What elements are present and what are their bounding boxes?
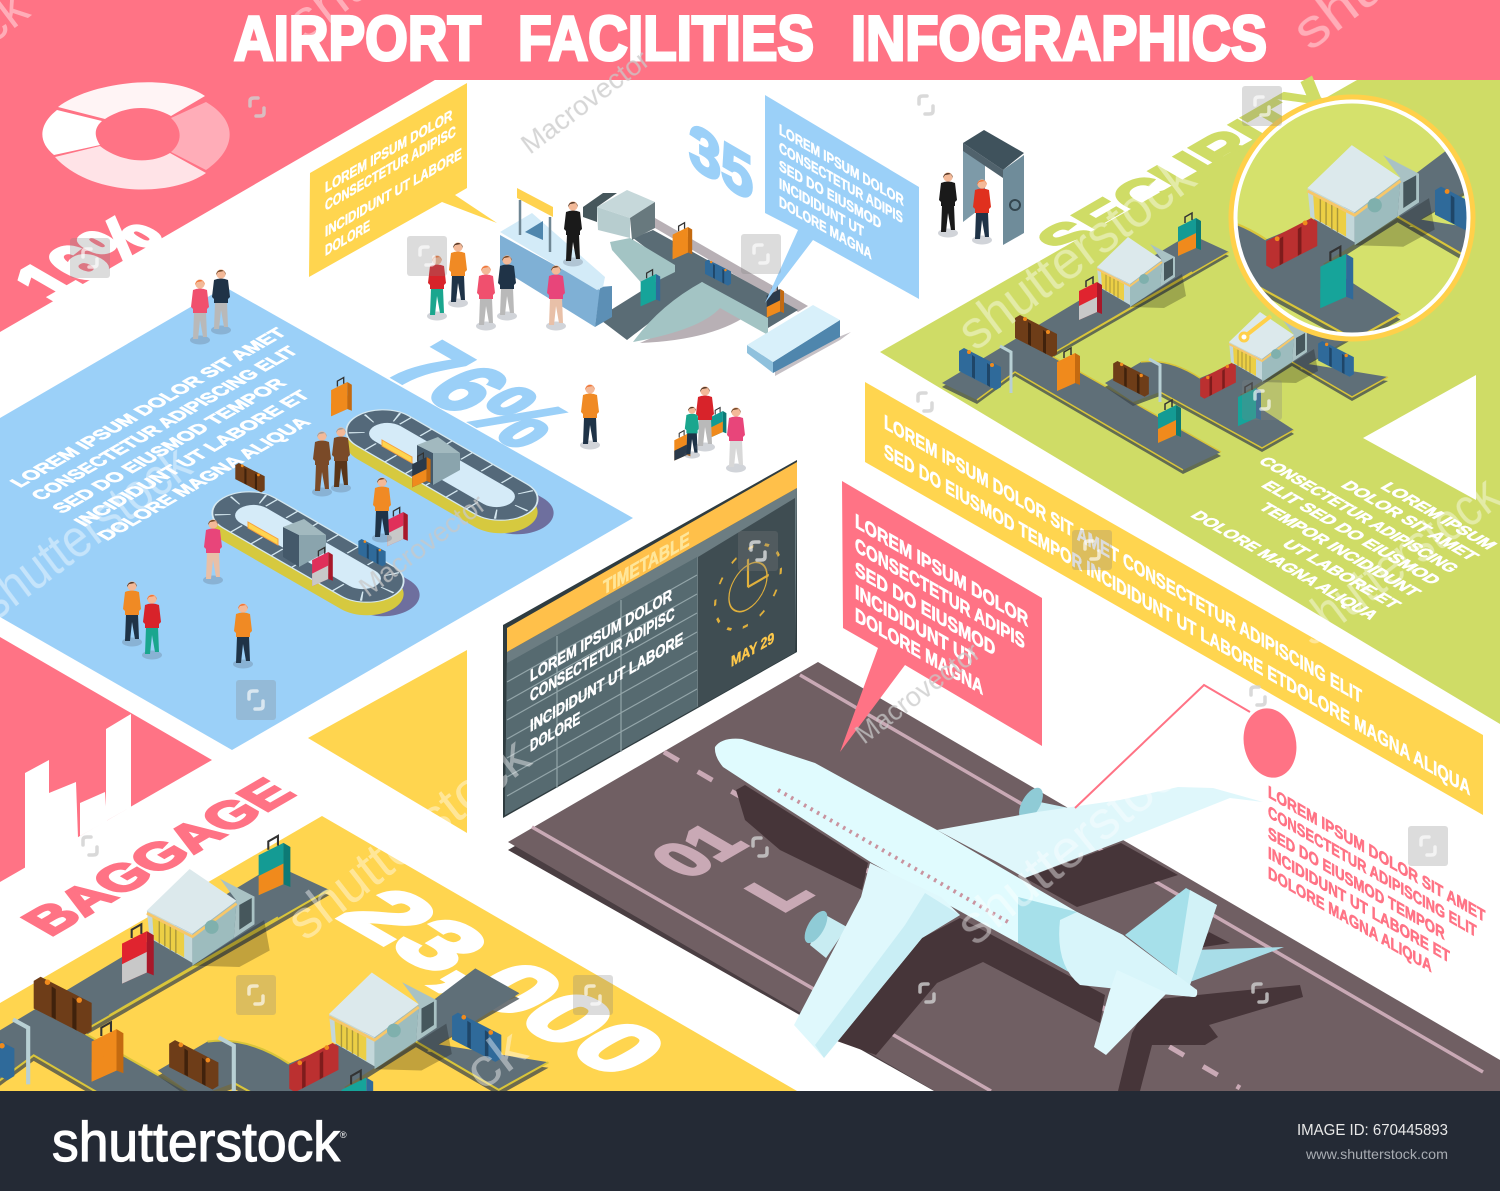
- panel: green security floor: [880, 71, 1500, 724]
- big number 76%: 76%: [366, 329, 593, 461]
- timetable heading: TIMETABLE: [603, 528, 690, 600]
- near engine: [800, 907, 847, 958]
- title banner: AIRPORT: [234, 4, 481, 74]
- stock watermarks: ck: [453, 1017, 538, 1102]
- yellow strip with text: LOREM IPSUM DOLOR SIT AMET CONSECTETUR ADIPISCING ELIT: [884, 411, 1362, 709]
- heading SECURITY: SECURITY: [1021, 71, 1361, 267]
- blue panel text: SED DO EIUSMOD TEMPOR: [48, 376, 292, 517]
- blue speech bubble: DOLORE MAGNA: [779, 193, 872, 264]
- passengers: [122, 172, 992, 668]
- carousel 2: [197, 483, 435, 625]
- check-in counter: [500, 188, 612, 327]
- registered mark: ®: [340, 1130, 347, 1140]
- timetable text: LOREM IPSUM DOLOR: [530, 585, 672, 686]
- check-in conveyor: [583, 190, 808, 343]
- airplane shadow: [736, 785, 1303, 1091]
- green panel text: [1186, 454, 1500, 622]
- pink text block: INCIDIDUNT UT LABORE ET: [1268, 843, 1450, 967]
- pink speech bubble: INCIDIDUNT UT: [855, 581, 975, 672]
- board rows: [505, 557, 697, 815]
- blue panel text: [6, 325, 316, 544]
- stock watermarks: Macrovector: [515, 44, 655, 160]
- blue panel text: INCIDIDUNT UT LABORE ET: [70, 388, 316, 530]
- green panel text: TEMPOR INCIDIDUNT: [1254, 500, 1426, 599]
- clock: [715, 530, 781, 644]
- white triangle: [1363, 375, 1476, 500]
- blue end box: [747, 305, 851, 376]
- green panel text: CONSECTETUR ADIPISCING: [1254, 454, 1463, 575]
- fuselage: [715, 739, 1197, 997]
- pink speech bubble: DOLORE MAGNA: [855, 604, 983, 700]
- title banner: INFOGRAPHICS: [851, 4, 1267, 74]
- luggage in claim area: [235, 378, 726, 586]
- yellow speech bubble: LOREM IPSUM DOLOR: [325, 106, 452, 197]
- yellow speech bubble: INCIDIDUNT UT LABORE: [325, 145, 462, 241]
- green panel text: UT LABORE ET: [1278, 537, 1406, 611]
- runway number 01: 01: [635, 814, 762, 888]
- stock watermarks: Macrovector: [849, 636, 986, 750]
- far engine: [1014, 784, 1069, 840]
- donut chart: [42, 82, 230, 189]
- big number 23,000: 23,000: [319, 874, 690, 1089]
- near wing: [794, 863, 960, 1058]
- magnifier circle: scanner close-up: [1228, 94, 1476, 342]
- pink speech bubble: [840, 481, 1042, 752]
- runway letter L: L: [731, 865, 826, 920]
- runway: [508, 662, 1500, 1100]
- yellow speech bubble: CONSECTETUR ADIPISC: [325, 122, 456, 215]
- green panel text: LOREM IPSUM: [1376, 480, 1500, 552]
- stock watermarks: shutterstock: [275, 725, 542, 951]
- footer logo: shutterstock: [52, 1110, 341, 1173]
- blue speech bubble: INCIDIDUNT UT: [779, 175, 864, 241]
- timetable text: CONSECTETUR ADIPISC: [530, 603, 675, 706]
- pink text block: LOREM IPSUM DOLOR SIT AMET: [1268, 782, 1486, 927]
- security conveyor belts: [942, 213, 1388, 474]
- timetable text: DOLORE: [530, 708, 580, 756]
- tail stabilizer left: [1094, 970, 1167, 1055]
- far wing: [937, 787, 1263, 878]
- green panel text: DOLORE MAGNA ALIQUA: [1186, 508, 1383, 622]
- panel: bar chart pink triangle: [0, 637, 212, 882]
- yellow speech bubble: DOLORE: [325, 217, 370, 260]
- panel: pink corner with donut chart: [0, 0, 440, 332]
- pink text block: DOLORE MAGNA ALIQUA: [1268, 863, 1432, 977]
- pink text block: SED DO EIUSMOD TEMPOR: [1268, 823, 1445, 944]
- pink callout line and dot: [1075, 685, 1303, 808]
- timetable text: INCIDIDUNT UT LABORE: [530, 628, 683, 736]
- blue speech bubble: LOREM IPSUM DOLOR: [779, 121, 904, 210]
- airplane: [715, 739, 1284, 1058]
- website: www.shutterstock.com: [1305, 1146, 1448, 1162]
- stock watermarks: Macrovector: [353, 488, 491, 603]
- baggage conveyor belts: [0, 834, 549, 1091]
- blue speech bubble: [765, 95, 919, 303]
- pink text block: CONSECTETUR ADIPISCING ELIT: [1268, 802, 1477, 942]
- timetable text: [530, 585, 683, 756]
- footer bar: [0, 1091, 1500, 1191]
- title banner: FACILITIES: [518, 4, 814, 74]
- heading BAGGAGE: BAGGAGE: [10, 771, 307, 943]
- white bars: [25, 714, 131, 869]
- carousel 1: [331, 401, 569, 543]
- yellow speech bubble: [309, 83, 497, 277]
- panel: yellow baggage floor: [0, 816, 797, 1091]
- number 35: 35: [689, 109, 753, 216]
- yellow triangle: [308, 650, 467, 833]
- pink speech bubble: CONSECTETUR ADIPIS: [855, 534, 1025, 654]
- tail stabilizer right: [1190, 947, 1284, 982]
- date: MAY 29: [731, 629, 774, 671]
- blue panel text: LOREM IPSUM DOLOR SIT AMET: [6, 325, 292, 491]
- blue speech bubble: CONSECTETUR ADIPIS: [779, 139, 903, 228]
- stock watermarks: shutterstock: [945, 727, 1209, 956]
- pink speech bubble: SED DO EIUSMOD: [855, 558, 995, 661]
- blue panel text: DOLORE MAGNA ALIQUA: [93, 415, 316, 544]
- pink speech bubble: LOREM IPSUM DOLOR: [855, 510, 1029, 632]
- blue speech bubble: SED DO EIUSMOD: [779, 157, 881, 233]
- tail fin: [1125, 888, 1217, 985]
- big number 16%: 16%: [0, 205, 180, 311]
- green panel text: ELIT SED DO EIUSMOD: [1257, 478, 1445, 587]
- green panel text: DOLOR SIT AMET: [1337, 478, 1484, 563]
- image id: IMAGE ID: 670445893: [1297, 1122, 1448, 1139]
- blue panel text: CONSECTETUR ADIPISCING ELIT: [27, 344, 304, 504]
- timetable board: [503, 460, 797, 818]
- panel: blue baggage claim floor: [0, 287, 633, 750]
- stock watermarks: shutterstock: [946, 145, 1207, 362]
- title banner: [0, 0, 1500, 80]
- metal detector gate: [963, 130, 1024, 245]
